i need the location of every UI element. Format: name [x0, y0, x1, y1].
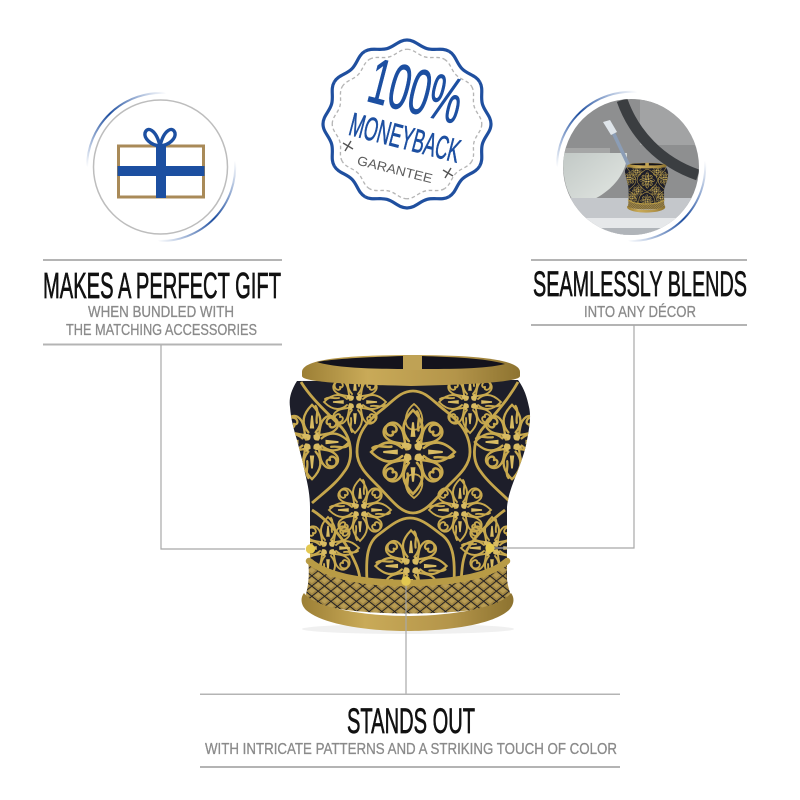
heading block: stands out: WITH INTRICATE PATTERNS AND A STRIKING TOUCH OF COLOR — [205, 741, 617, 758]
connector: left callout — [161, 345, 305, 549]
connector: right callout — [494, 325, 634, 548]
icon: gift in circle — [87, 93, 235, 241]
marker dots — [306, 543, 495, 586]
heading block: stands out: STANDS OUT — [347, 702, 475, 741]
badge: 100% moneyback garantee — [313, 30, 501, 218]
heading block: makes a perfect gift: THE MATCHING ACCESSORIES — [66, 322, 257, 339]
badge: 100% moneyback garantee: MONEYBACK — [346, 105, 464, 170]
heading block: seamlessly blends — [531, 259, 747, 326]
heading block: makes a perfect gift: MAKES A PERFECT GIFT — [43, 265, 281, 306]
heading block: makes a perfect gift: WHEN BUNDLED WITH — [88, 304, 234, 321]
photo: holder on bathroom counter — [557, 92, 705, 241]
heading block: stands out — [200, 694, 620, 768]
badge: 100% moneyback garantee: 100% — [361, 44, 471, 138]
heading block: makes a perfect gift — [43, 259, 282, 346]
badge: 100% moneyback garantee: GARANTEE — [356, 153, 434, 186]
heading block: seamlessly blends: INTO ANY DÉCOR — [584, 302, 696, 321]
connector: bottom callout — [405, 585, 407, 694]
product: ornate toothbrush holder — [275, 355, 549, 634]
